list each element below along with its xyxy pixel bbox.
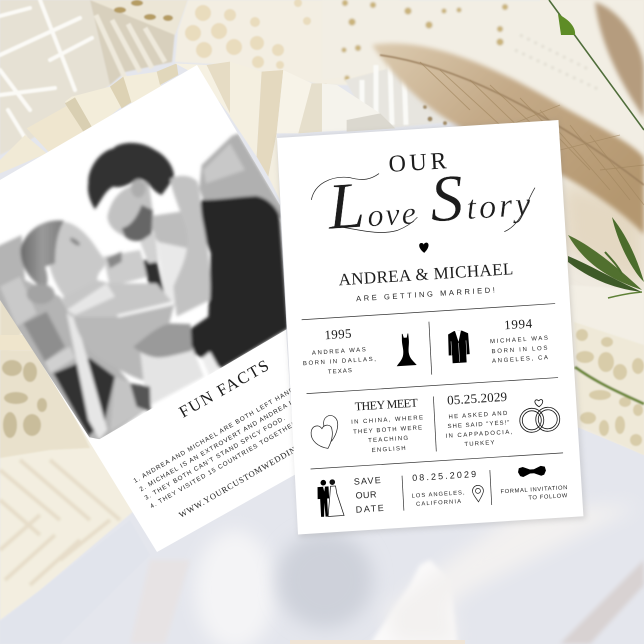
text: wedding date and place: CALIFORNIA bbox=[416, 499, 461, 508]
text: formal invitation: TO FOLLOW bbox=[528, 493, 568, 502]
text: proposal: HE ASKED AND bbox=[448, 411, 508, 421]
website address: WWW.YOURCUSTOMWEDDINGSITE.COM bbox=[177, 418, 344, 520]
text: they meet: TEACHING bbox=[368, 436, 409, 444]
script title: love story: Story bbox=[428, 157, 535, 236]
script title: love story bbox=[325, 157, 535, 244]
text: they meet: ENGLISH bbox=[372, 446, 406, 454]
man's jacket bbox=[189, 196, 288, 368]
dotted pale fabric top right bbox=[322, 0, 644, 200]
card shadow bbox=[277, 120, 586, 537]
couple photograph bbox=[0, 133, 288, 443]
text: michael birth bbox=[489, 315, 549, 365]
text: formal invitation: FORMAL INVITATION bbox=[500, 485, 568, 495]
text: save our date: SAVE bbox=[354, 475, 381, 487]
icon: bow tie bbox=[518, 466, 546, 477]
pampas grass plumes bbox=[372, 2, 644, 290]
text: michael birth: ANGELES, CA bbox=[492, 355, 548, 365]
text: andrea birth: ANDREA WAS bbox=[312, 347, 366, 357]
man's hand bbox=[133, 323, 192, 357]
text: michael birth: BORN IN LOS bbox=[491, 346, 548, 355]
text: proposal bbox=[443, 389, 513, 449]
panel: love story card bbox=[277, 120, 583, 534]
panel: fun facts photo card bbox=[0, 65, 295, 552]
text: proposal: SHE SAID "YES!" bbox=[447, 420, 510, 430]
text: andrea birth: BORN IN DALLAS, bbox=[303, 357, 376, 367]
text: they meet: THEY BOTH WERE bbox=[353, 425, 422, 436]
text: michael birth: MICHAEL WAS bbox=[490, 336, 548, 345]
text: save our date bbox=[354, 475, 384, 515]
text: wedding date and place: LOS ANGELES, bbox=[411, 490, 465, 500]
text: formal invitation bbox=[500, 485, 568, 503]
card paper bbox=[277, 120, 583, 534]
woman's raised arm and hand bbox=[170, 176, 210, 317]
icon: suit bbox=[447, 330, 470, 363]
right building bbox=[199, 133, 287, 220]
icon: bride and groom bbox=[317, 479, 344, 517]
ribbed white fabric under pampas bbox=[345, 60, 490, 128]
woman's back and dress bbox=[62, 280, 172, 317]
script title: love story: Love bbox=[325, 165, 419, 244]
text: andrea birth: TEXAS bbox=[328, 368, 352, 376]
text: save our date: DATE bbox=[356, 503, 384, 515]
title flourishes bbox=[310, 164, 537, 244]
text: wedding date and place bbox=[410, 469, 478, 508]
top left woven white fabric bbox=[0, 0, 188, 155]
list of facts: 3. THEY BOTH CAN'T STAND SPICY FOOD. bbox=[144, 415, 287, 502]
icon: dress bbox=[395, 333, 417, 366]
list of facts: 2. MICHAEL IS AN EXTROVERT AND ANDREA IS AN INTROVERT. bbox=[138, 366, 352, 493]
text: proposal: 05.25.2029 bbox=[447, 389, 507, 408]
text: save our date: OUR bbox=[355, 489, 377, 501]
man's face bbox=[107, 180, 154, 241]
text: proposal: TURKEY bbox=[464, 440, 495, 448]
heading: fun facts: FUN FACTS bbox=[176, 356, 272, 421]
icon: wedding rings bbox=[519, 398, 560, 433]
card paper bbox=[0, 65, 330, 552]
top right green stem bbox=[549, 0, 644, 130]
left lace and knit fabric bbox=[0, 295, 150, 644]
text: they meet bbox=[350, 395, 425, 455]
text: wedding date and place: 08.25.2029 bbox=[412, 469, 476, 483]
left building bbox=[0, 235, 150, 443]
white silk with light patches bbox=[130, 505, 644, 644]
icon: heart bbox=[419, 243, 429, 253]
man's neck and shirt bbox=[151, 210, 189, 250]
text: they meet: IN CHINA, WHERE bbox=[351, 415, 423, 426]
divider lines bbox=[302, 304, 566, 517]
right lace fabric bbox=[570, 285, 644, 455]
icon: location pin bbox=[472, 485, 484, 502]
man's curly hair bbox=[88, 143, 174, 209]
crochet fabric top centre bbox=[175, 0, 400, 85]
subtitle: ARE GETTING MARRIED! bbox=[356, 285, 495, 303]
icon: two hearts bbox=[310, 415, 339, 449]
paper fan bbox=[0, 62, 395, 200]
list of facts: 4. THEY VISITED 15 COUNTRIES TOGETHER. bbox=[149, 418, 301, 510]
woman's face bbox=[47, 222, 105, 300]
list of facts: 1. ANDREA AND MICHAEL ARE BOTH LEFT HANDED. bbox=[132, 380, 308, 485]
text: they meet: THEY MEET bbox=[354, 396, 419, 414]
green leaves bbox=[568, 217, 644, 298]
names: ANDREA & MICHAEL bbox=[338, 259, 514, 289]
pale base behind right side bbox=[540, 0, 644, 455]
text: proposal: IN CAPPADOCIA, bbox=[445, 430, 513, 440]
heading: our: OUR bbox=[388, 148, 447, 178]
text: andrea birth bbox=[301, 324, 377, 377]
dark hedge bbox=[53, 358, 115, 437]
text: andrea birth: 1995 bbox=[324, 326, 352, 342]
text: michael birth: 1994 bbox=[504, 316, 533, 332]
woman's hair bbox=[21, 220, 64, 290]
